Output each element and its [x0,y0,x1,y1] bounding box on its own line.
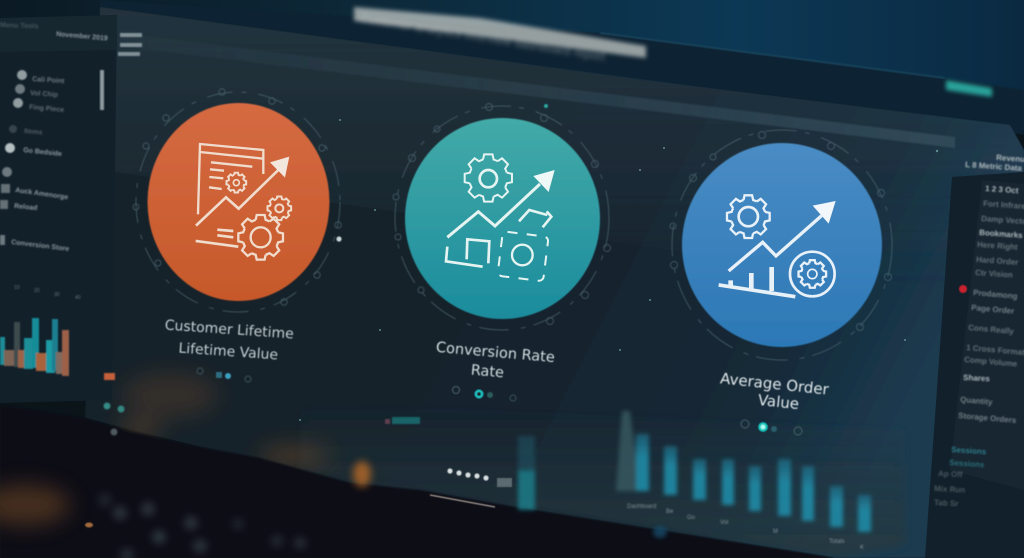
right side panel [925,153,1024,558]
right side panel: Prodamong [973,288,1018,301]
ring marker [336,236,342,242]
left sidebar panel: Auck Amenorge [15,187,69,201]
panel: conversion rate [393,104,610,401]
chart axis labels: Totals [829,539,845,545]
left sidebar panel: Go Bedside [23,147,62,158]
sidebar scrollbar [100,70,104,110]
left sidebar panel [0,15,142,403]
right side panel: Cons Really [968,323,1015,336]
top right status light [946,80,992,97]
label [435,340,555,381]
pager [452,386,516,401]
pager [741,420,802,435]
smoky orange glow [118,373,331,466]
right side panel: 1 Cross Format [966,343,1024,357]
top blurred title: Customer analytics overview dashboard report [360,11,607,64]
label [164,318,294,363]
right side panel: Quantity [960,395,993,407]
right side panel: Shares [963,373,991,383]
left sidebar panel: Cali Point [32,76,65,85]
left chart tick labels: 30 [54,292,60,298]
dashed ring [133,89,341,312]
right side panel: Tab Sr [934,498,959,508]
left sidebar panel: Items [24,128,43,137]
label: Rate [470,363,505,381]
chart axis labels: M [773,529,778,535]
left sidebar panel: Menu Tools [0,22,39,30]
left sidebar panel: Reload [14,203,38,212]
panel: average order value [670,130,892,435]
chart axis labels: Dashboard [627,504,656,510]
right side panel: Mix Run [934,484,966,495]
glow and pager dots [104,373,667,538]
label: Customer Lifetime [164,318,294,343]
dark band below bezel line [100,0,1024,135]
right side panel: 1 2 3 Oct [985,184,1019,195]
small particles [299,119,938,421]
red alert dot [959,285,967,293]
label: Lifetime Value [178,341,279,363]
top bezel [0,0,1024,130]
right side panel: Bookmarks [979,228,1024,240]
bottom keyboard area [0,405,835,558]
chart axis labels: Vol [720,520,728,526]
chart axis labels [627,504,864,551]
right side panel: Hard Order [976,255,1019,267]
label [719,369,830,413]
right side panel: Sessions [949,458,985,469]
left sidebar panel: Fing Piece [29,104,64,114]
icon: gear, growth arrow, house and target [446,154,555,281]
bezel line [600,33,945,78]
left chart tick labels [14,285,81,301]
right side panel: Page Order [971,303,1015,316]
label: Conversion Rate [435,340,555,366]
right side panel: Ap Off [938,469,963,479]
left sidebar panel: November 2019 [56,31,108,43]
right side panel: L 8 Metric Data [965,160,1023,173]
icon: report with growth arrow and gears [196,144,291,260]
chart axis labels: K [860,545,864,551]
right side panel: Sessions [951,445,987,456]
dashed ring [393,104,610,330]
blue circle [682,143,882,347]
right side panel: Storage Orders [958,411,1017,425]
right side panel: Here Right [977,240,1018,252]
ring marker [544,104,548,108]
left mini bar chart [0,318,69,376]
panel lower glow [300,400,905,558]
label: Average Order [719,369,830,399]
panel top shading [100,7,1024,300]
left chart tick labels: 20 [34,288,40,294]
panel: customer lifetime value [133,89,342,382]
left sidebar panel: Conversion Store [11,239,70,253]
icon: gears, growth arrow and bars [719,195,836,297]
right side panel: Comp Volume [964,355,1018,369]
orange circle [148,103,330,301]
hamburger menu [118,33,142,56]
right side panel: Ctr Vision [975,268,1013,280]
left chart tick labels: 10 [14,285,20,291]
chart axis labels: Go [687,515,696,521]
label: Value [757,391,800,413]
bottom bar chart [518,411,871,532]
left sidebar panel: Vol Chip [30,90,58,99]
teal circle [405,118,600,319]
panel header strip [120,33,955,148]
chart axis labels: Be [666,509,674,515]
pager [197,368,251,382]
left chart tick labels: 40 [75,295,81,301]
dashed ring [670,130,892,360]
